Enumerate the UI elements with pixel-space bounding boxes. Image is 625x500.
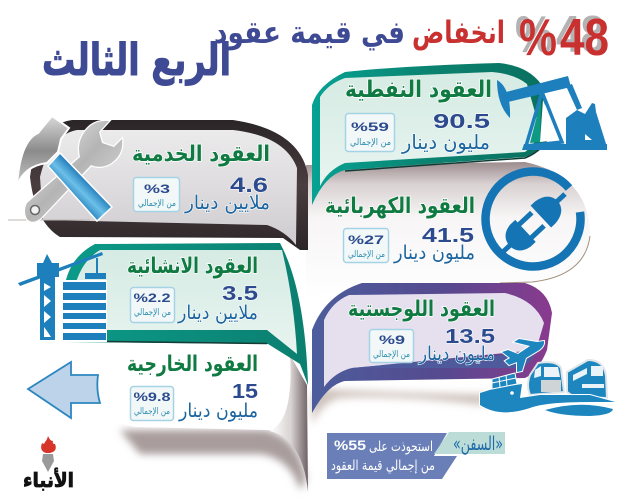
logistics share badge: %9 <box>379 333 405 347</box>
oil unit: مليون دينار <box>401 130 490 154</box>
logo: Al-Anba <box>23 436 74 492</box>
title line one: 48 <box>560 9 609 67</box>
service share badge <box>134 178 180 212</box>
foreign share badge: %9.8 <box>134 390 171 404</box>
foreign share badge <box>130 386 174 420</box>
electrical share badge <box>344 228 388 262</box>
hammer <box>17 116 112 221</box>
title line one: انخفاض <box>412 15 505 51</box>
service share badge: %3 <box>144 182 170 196</box>
callout: ships 55 percent: استحوذت على <box>369 439 433 455</box>
panel: foreign contracts <box>98 343 308 492</box>
foreign value: 15 <box>232 381 258 403</box>
logistics share badge <box>370 330 414 362</box>
title line one: % <box>519 9 557 67</box>
construction value: 3.5 <box>222 283 258 305</box>
panel: oil contracts <box>312 63 550 205</box>
oil value: 90.5 <box>433 111 490 133</box>
oil share badge <box>346 114 394 152</box>
foreign heading: العقود الخارجية <box>127 352 258 377</box>
title line two: الربع الثالث <box>42 35 231 86</box>
panel: construction contracts <box>64 243 308 385</box>
panel: electrical contracts <box>306 162 590 300</box>
icon: transport plane ship truck train <box>480 339 615 416</box>
construction share badge: من الإجمالي <box>134 308 171 318</box>
construction share badge <box>130 288 174 322</box>
icon: crane and building <box>18 252 107 342</box>
callout: ships 55 percent: %55 <box>334 437 366 453</box>
electrical value: 41.5 <box>422 225 474 247</box>
icon: left arrow <box>28 362 100 418</box>
title line one: % <box>515 6 553 64</box>
service value: 4.6 <box>230 174 268 197</box>
electrical heading: العقود الكهربائية <box>325 194 475 219</box>
electrical share badge: %27 <box>348 233 384 247</box>
icon: hammer and wrench <box>17 116 122 222</box>
foreign unit: مليون دينار <box>178 400 258 422</box>
service heading: العقود الخدمية <box>132 142 270 167</box>
panel: service contracts <box>8 120 308 250</box>
logistics share badge: من الإجمالي <box>373 350 410 360</box>
title line one: 48 <box>556 6 605 64</box>
oil heading: العقود النفطية <box>345 77 492 103</box>
electrical share badge: من الإجمالي <box>348 250 385 260</box>
callout: ships 55 percent <box>327 432 505 479</box>
title line one <box>214 6 609 67</box>
plane <box>502 339 544 372</box>
icon: oil pumpjack <box>497 76 607 150</box>
service share badge: من الإجمالي <box>138 199 176 209</box>
service unit: ملايين دينار <box>184 192 270 214</box>
truck <box>528 362 564 395</box>
ship and waves <box>480 373 615 416</box>
logo: Al-Anba: الأنباء <box>23 467 74 492</box>
oil share badge: %59 <box>351 120 389 134</box>
construction unit: ملايين دينار <box>177 302 258 324</box>
callout: ships 55 percent: «السفن» <box>453 433 503 455</box>
construction share badge: %2.2 <box>134 291 171 305</box>
logistics unit: مليون دينار <box>418 343 495 365</box>
wrench <box>25 121 122 222</box>
electrical unit: مليون دينار <box>393 242 475 264</box>
oil share badge: من الإجمالي <box>350 138 391 148</box>
logistics value: 13.5 <box>445 326 495 348</box>
title line one: في قيمة عقود <box>214 15 405 51</box>
title <box>42 6 609 86</box>
panel: logistics contracts <box>312 283 552 425</box>
train <box>567 360 607 398</box>
icon: power plug <box>486 172 581 267</box>
callout: ships 55 percent: من إجمالي قيمة العقود <box>331 458 435 474</box>
construction heading: العقود الانشائية <box>127 254 258 279</box>
logistics heading: العقود اللوجستية <box>348 297 495 322</box>
foreign share badge: من الإجمالي <box>134 407 170 417</box>
